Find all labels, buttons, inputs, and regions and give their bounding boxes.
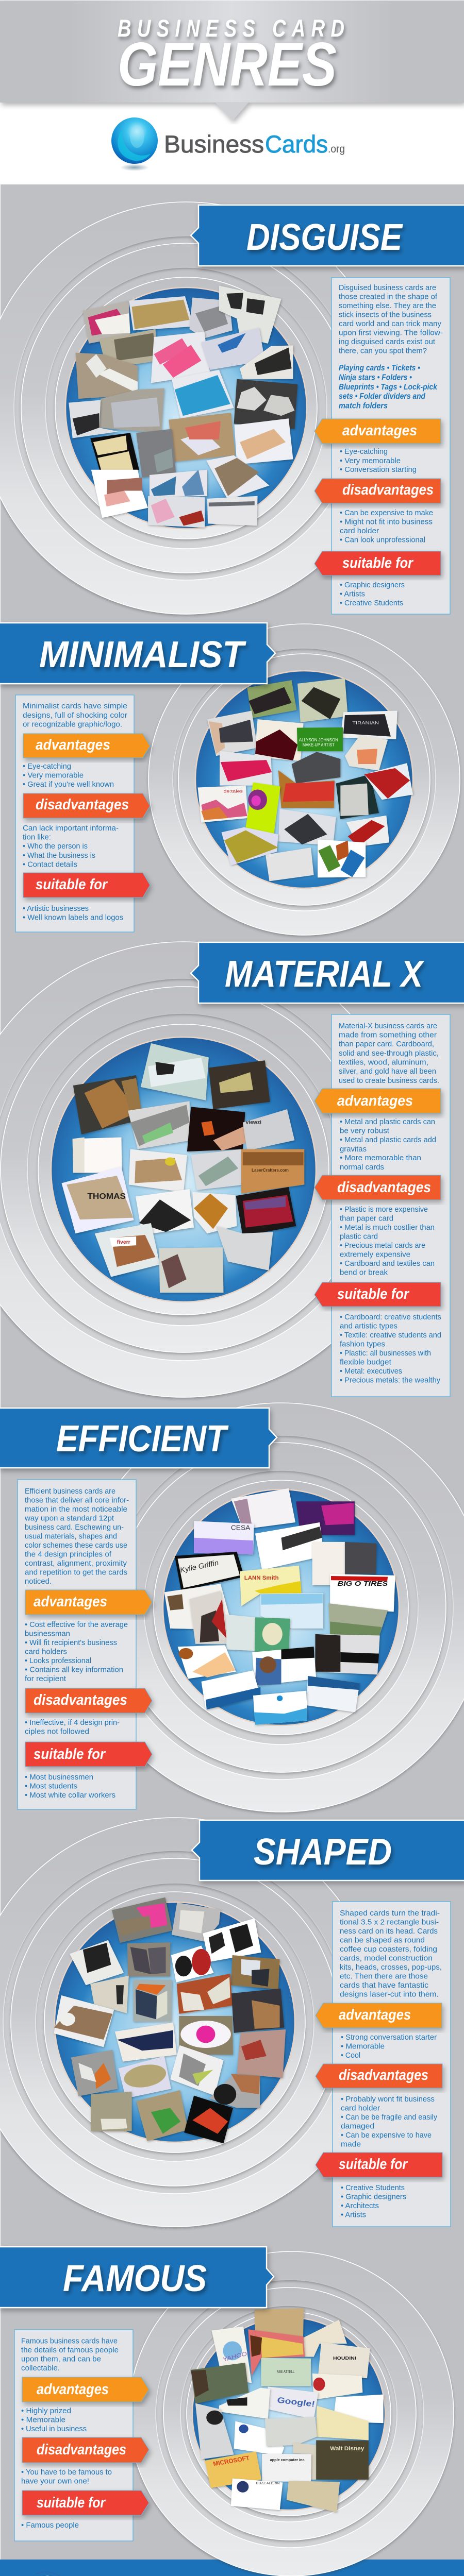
panel: shaped: [0, 1818, 464, 2227]
info box: efficient: [18, 1480, 152, 1809]
intro text: and repetition to get the cards: [25, 1568, 127, 1577]
card collage: efficient: Kylie Griffin: [179, 1559, 220, 1574]
suitable for: fashion types: [340, 1340, 385, 1349]
disadvantages: • Ineffective, if 4 design prin-: [25, 1718, 120, 1727]
disadvantages: than paper card: [340, 1214, 393, 1223]
card collage: famous: ABE ATTELL: [277, 2369, 294, 2374]
suitable for: and artistic types: [340, 1322, 397, 1330]
suitable for: • Precious metals: the wealthy: [340, 1376, 440, 1385]
intro text: can be shaped as round: [340, 1936, 425, 1944]
card collage: material x: [61, 1043, 304, 1293]
intro text: color schemes these cards use: [25, 1541, 127, 1550]
disadvantages: [314, 1175, 441, 1277]
info box: minimalist: [15, 695, 150, 932]
card collage: efficient: LANN Smith: [244, 1575, 279, 1581]
card collage: minimalist: [198, 678, 413, 881]
suitable for: [25, 1742, 152, 1800]
intro text: Famous business cards have: [21, 2337, 118, 2345]
intro text: business card. Eschewing un-: [25, 1523, 124, 1532]
intro text: Minimalist cards have simple: [23, 702, 127, 710]
card collage: material x: LaserCrafters.com: [252, 1168, 289, 1173]
disadvantages: [314, 479, 441, 544]
card collage: material x: viewzi: [246, 1120, 261, 1126]
intro text: Disguised business cards are: [339, 283, 436, 292]
card collage: material x: THOMAS: [87, 1192, 126, 1201]
disadvantages: • Cardboard and textiles can: [340, 1259, 435, 1268]
advantages: advantages: [34, 1594, 107, 1610]
title: BUSINESS CARD: [118, 15, 344, 42]
intro text: cards that have fantastic: [340, 1981, 429, 1990]
intro text: solid and see-through plastic,: [339, 1049, 439, 1058]
card collage: famous: MICROSOFT: [212, 2454, 251, 2467]
intro text: coffee cup coasters, folding: [340, 1945, 437, 1954]
advantages: • Strong conversation starter: [341, 2033, 437, 2042]
suitable for: [314, 551, 441, 607]
card collage: famous: [191, 2308, 384, 2512]
panel: disguise: [0, 202, 464, 614]
suitable for: suitable for: [337, 1286, 410, 1302]
intro text: Material-X business cards are: [339, 1022, 437, 1030]
info box: disguise: [314, 278, 450, 614]
card collage: disguise: [69, 286, 297, 528]
intro text: those that deliver all core infor-: [25, 1496, 129, 1504]
panel: efficient: [0, 1403, 464, 1812]
disadvantages: • Can be be fragile and easily: [341, 2113, 437, 2122]
disadvantages: card holder: [341, 2104, 380, 2112]
advantages: • Cost effective for the average: [25, 1620, 128, 1629]
suitable for: suitable for: [36, 876, 108, 893]
suitable for: [316, 2153, 442, 2219]
suitable for: flexible budget: [340, 1358, 392, 1366]
advantages: • Will fit recipient's business: [25, 1638, 117, 1647]
advantages: • Memorable: [21, 2415, 65, 2425]
icon: globe: [111, 117, 158, 171]
intro text: designs, full of shocking color: [23, 711, 127, 720]
card collage: famous: apple computer inc.: [270, 2458, 306, 2462]
heading: EFFICIENT: [56, 1418, 229, 1460]
card collage: famous: BUZZ ALDRIN: [256, 2482, 280, 2485]
panel: material x: [0, 942, 464, 1397]
header band: [0, 1, 464, 103]
advantages: advantages: [337, 1093, 413, 1109]
genre list: [339, 364, 438, 410]
disadvantages: disadvantages: [37, 2442, 126, 2458]
wordmark: [164, 130, 345, 158]
concentric rings: [76, 1403, 464, 1812]
advantages: • Cool: [341, 2051, 360, 2060]
intro text: mation in the most noticeable: [25, 1505, 127, 1514]
disadvantages: [316, 2064, 442, 2148]
disadvantages: • Contact details: [23, 860, 77, 869]
suitable for: [314, 1282, 441, 1385]
suitable for: • Graphic designers: [340, 581, 405, 589]
card collage: efficient: [164, 1488, 395, 1725]
intro text: textiles, wood, aluminum,: [339, 1058, 428, 1066]
intro text: Efficient business cards are: [25, 1487, 115, 1496]
intro text: than paper card. Cardboard,: [339, 1040, 434, 1048]
suitable for: • Creative Students: [341, 2183, 405, 2192]
advantages: gravitas: [340, 1145, 367, 1154]
concentric rings: [148, 624, 460, 935]
intro text: noticed.: [25, 1577, 52, 1586]
suitable for: • Famous people: [21, 2521, 79, 2530]
card collage: shaped: [54, 1897, 286, 2143]
advantages: [314, 419, 441, 474]
wordmark: Cards: [265, 130, 328, 158]
card collage: famous: Walt Disney: [330, 2445, 364, 2452]
disadvantages: disadvantages: [337, 1179, 431, 1196]
advantages: normal cards: [340, 1163, 384, 1172]
heading: FAMOUS: [63, 2258, 207, 2299]
intro text: the details of famous people: [21, 2346, 119, 2354]
advantages: businessman: [25, 1629, 70, 1638]
advantages: • Memorable: [341, 2042, 385, 2050]
heading: DISGUISE: [246, 217, 403, 258]
disadvantages: made: [341, 2140, 361, 2148]
wordmark: .org: [328, 143, 345, 155]
genre list: Ninja stars • Folders •: [339, 373, 412, 382]
intro text: usual materials, shapes and: [25, 1532, 117, 1540]
suitable for: • Artistic businesses: [23, 904, 89, 913]
disadvantages: • Metal is much costlier than: [340, 1223, 435, 1232]
intro text: Shaped cards turn the tradi-: [340, 1909, 440, 1918]
advantages: advantages: [37, 2381, 109, 2398]
genre list: sets • Folder dividers and: [339, 392, 425, 401]
banner: efficient: [0, 1408, 277, 1468]
suitable for: • Textile: creative students and: [340, 1331, 441, 1340]
intro text: or recognizable graphic/logo.: [23, 720, 122, 728]
banner: shaped: [192, 1820, 464, 1880]
disadvantages: disadvantages: [339, 2067, 428, 2083]
genre list: Playing cards • Tickets •: [339, 364, 420, 372]
intro text: made from something other: [339, 1030, 437, 1040]
advantages: [314, 1089, 441, 1172]
disadvantages: • Can be expensive to make: [340, 509, 433, 517]
card collage: minimalist: MAKE-UP ARTIST: [303, 743, 335, 748]
advantages: card holders: [25, 1648, 67, 1656]
disadvantages: ciples not followed: [25, 1727, 89, 1736]
footer logo: info graphic world: [25, 2572, 71, 2576]
disadvantages: bend or break: [340, 1268, 388, 1277]
card collage: famous: Google!: [276, 2395, 316, 2409]
disadvantages: • Might not fit into business: [340, 517, 433, 527]
advantages: • Metal and plastic cards add: [340, 1136, 436, 1144]
suitable for: suitable for: [342, 555, 413, 571]
disadvantages: plastic card: [340, 1232, 378, 1241]
disadvantages: disadvantages: [342, 482, 434, 498]
advantages: • Metal and plastic cards can: [340, 1117, 435, 1126]
intro text: kits, heads, crosses, pop-ups,: [340, 1963, 442, 1972]
suitable for: • Artists: [341, 2210, 366, 2219]
advantages: [23, 734, 150, 789]
intro text: tional 3.5 x 2 rectangle busi-: [340, 1918, 439, 1927]
intro text: [339, 1022, 439, 1085]
advantages: advantages: [342, 422, 417, 439]
card collage: minimalist: de:tales: [224, 789, 243, 794]
info box: material x: [314, 1014, 450, 1397]
suitable for: • Cardboard: creative students: [340, 1313, 441, 1321]
intro text: something else. They are the: [339, 301, 436, 310]
intro text: cards, model construction: [340, 1954, 433, 1963]
suitable for: • Graphic designers: [341, 2193, 406, 2201]
panel: minimalist: [0, 623, 460, 935]
intro text: way upon a standard 12pt: [24, 1514, 114, 1523]
banner: famous: [0, 2247, 274, 2308]
intro text: stick insects of the business: [339, 310, 432, 319]
intro text: the 4 design principles of: [25, 1550, 112, 1559]
banner: material x: [191, 942, 464, 1003]
banner: disguise: [191, 205, 464, 266]
concentric rings: [0, 202, 392, 614]
concentric rings: [129, 2251, 454, 2576]
panel: famous: [0, 2247, 454, 2576]
intro text: etc. Then there are those: [340, 1972, 428, 1980]
advantages: • Very memorable: [23, 771, 84, 780]
advantages: • Looks professional: [25, 1656, 91, 1665]
card collage: efficient: CESA: [231, 1524, 250, 1531]
intro text: [24, 1487, 129, 1586]
advantages: advantages: [339, 2007, 411, 2023]
advantages: [21, 2377, 149, 2433]
intro text: collectable.: [21, 2364, 60, 2372]
info box: shaped: [316, 1902, 451, 2227]
disadvantages: • Who the person is: [23, 842, 88, 851]
intro text: there, can you spot them?: [339, 346, 427, 355]
advantages: • Very memorable: [340, 456, 401, 465]
logo: BusinessCards.org: [111, 117, 345, 171]
suitable for: • Most students: [25, 1782, 77, 1791]
disadvantages: [25, 1688, 152, 1736]
suitable for: • Creative Students: [340, 599, 403, 607]
advantages: • Eye-catching: [340, 447, 388, 456]
disadvantages: damaged: [341, 2122, 374, 2131]
intro text: contrast, alignment, proximity: [25, 1559, 127, 1568]
advantages: [25, 1590, 152, 1683]
disadvantages: • Can look unprofessional: [340, 536, 425, 544]
intro text: [340, 1909, 442, 1999]
card collage: famous: YAHOO!: [222, 2350, 250, 2363]
heading: MATERIAL X: [225, 954, 425, 995]
advantages: • Eye-catching: [23, 762, 71, 771]
intro text: upon them, and can be: [21, 2354, 101, 2364]
heading: SHAPED: [254, 1832, 392, 1873]
disadvantages: tion like:: [23, 833, 51, 842]
heading: MINIMALIST: [39, 634, 247, 675]
disadvantages: • Probably wont fit business: [341, 2095, 435, 2104]
disadvantages: [23, 793, 150, 869]
suitable for: suitable for: [339, 2156, 408, 2173]
disadvantages: • Can be expensive to have: [341, 2131, 432, 2140]
advantages: advantages: [36, 737, 110, 753]
intro text: upon first viewing. The follow-: [339, 329, 443, 337]
disadvantages: disadvantages: [34, 1692, 127, 1708]
intro text: [23, 702, 127, 728]
intro text: [21, 2337, 119, 2372]
disadvantages: card holder: [340, 527, 379, 535]
intro text: those created in the shape of: [339, 293, 438, 301]
disadvantages: extremely expensive: [340, 1250, 410, 1259]
advantages: for recipient: [25, 1674, 67, 1683]
suitable for: • Metal: executives: [340, 1367, 402, 1376]
intro text: designs laser-cut into them.: [340, 1990, 439, 1999]
card collage: minimalist: ALLYSON JOHNSON: [299, 738, 338, 742]
disadvantages: have your own one!: [21, 2477, 89, 2485]
intro text: ing disguised cards exist out: [339, 337, 436, 346]
suitable for: [23, 873, 150, 922]
suitable for: • Well known labels and logos: [23, 913, 123, 922]
suitable for: • Most white collar workers: [25, 1791, 115, 1800]
header speech pointer: [214, 102, 249, 121]
advantages: • Conversation starting: [340, 465, 417, 474]
suitable for: • Plastic: all businesses with: [340, 1349, 431, 1358]
title: GENRES: [118, 30, 337, 99]
header: [0, 1, 464, 121]
intro text: ness card on its head. Cards: [340, 1927, 438, 1936]
card collage: material x: fiverr: [117, 1240, 130, 1245]
suitable for: • Architects: [341, 2201, 379, 2210]
disadvantages: • Precious metal cards are: [340, 1241, 425, 1250]
suitable for: • Most businessmen: [25, 1773, 93, 1782]
suitable for: suitable for: [37, 2495, 106, 2511]
suitable for: • Artists: [340, 589, 365, 599]
card collage: efficient: BIG O TIRES: [338, 1580, 388, 1587]
advantages: • More memorable than: [340, 1154, 421, 1162]
advantages: • Highly prized: [21, 2406, 71, 2415]
disadvantages: disadvantages: [36, 796, 129, 813]
card collage: minimalist: TIRANIAN: [352, 721, 379, 725]
intro text: [339, 283, 443, 355]
disadvantages: • What the business is: [23, 851, 95, 860]
card collage: famous: HOUDINI: [333, 2356, 356, 2361]
disadvantages: • You have to be famous to: [21, 2468, 112, 2477]
advantages: • Useful in business: [21, 2425, 87, 2433]
info box: famous: [14, 2330, 149, 2541]
intro text: card world and can trick many: [339, 319, 441, 328]
wordmark: Business: [164, 130, 264, 158]
suitable for: [21, 2490, 149, 2530]
advantages: be very robust: [340, 1126, 390, 1136]
advantages: • Contains all key information: [25, 1665, 123, 1674]
concentric rings: [0, 1818, 379, 2227]
suitable for: suitable for: [34, 1746, 106, 1762]
concentric rings: [0, 942, 411, 1397]
disadvantages: Can lack important informa-: [23, 824, 119, 833]
disadvantages: [21, 2437, 149, 2485]
intro text: used to create business cards.: [339, 1076, 439, 1085]
genre list: Blueprints • Tags • Lock-pick: [339, 383, 438, 392]
advantages: [316, 2003, 442, 2060]
footer band: [0, 2560, 464, 2576]
icon: outer arcs: [25, 2572, 71, 2576]
banner: minimalist: [0, 623, 275, 684]
disadvantages: • Plastic is more expensive: [340, 1205, 428, 1214]
intro text: silver, and gold have all been: [339, 1067, 436, 1076]
advantages: • Great if you're well known: [23, 780, 114, 789]
genre list: match folders: [339, 402, 388, 410]
